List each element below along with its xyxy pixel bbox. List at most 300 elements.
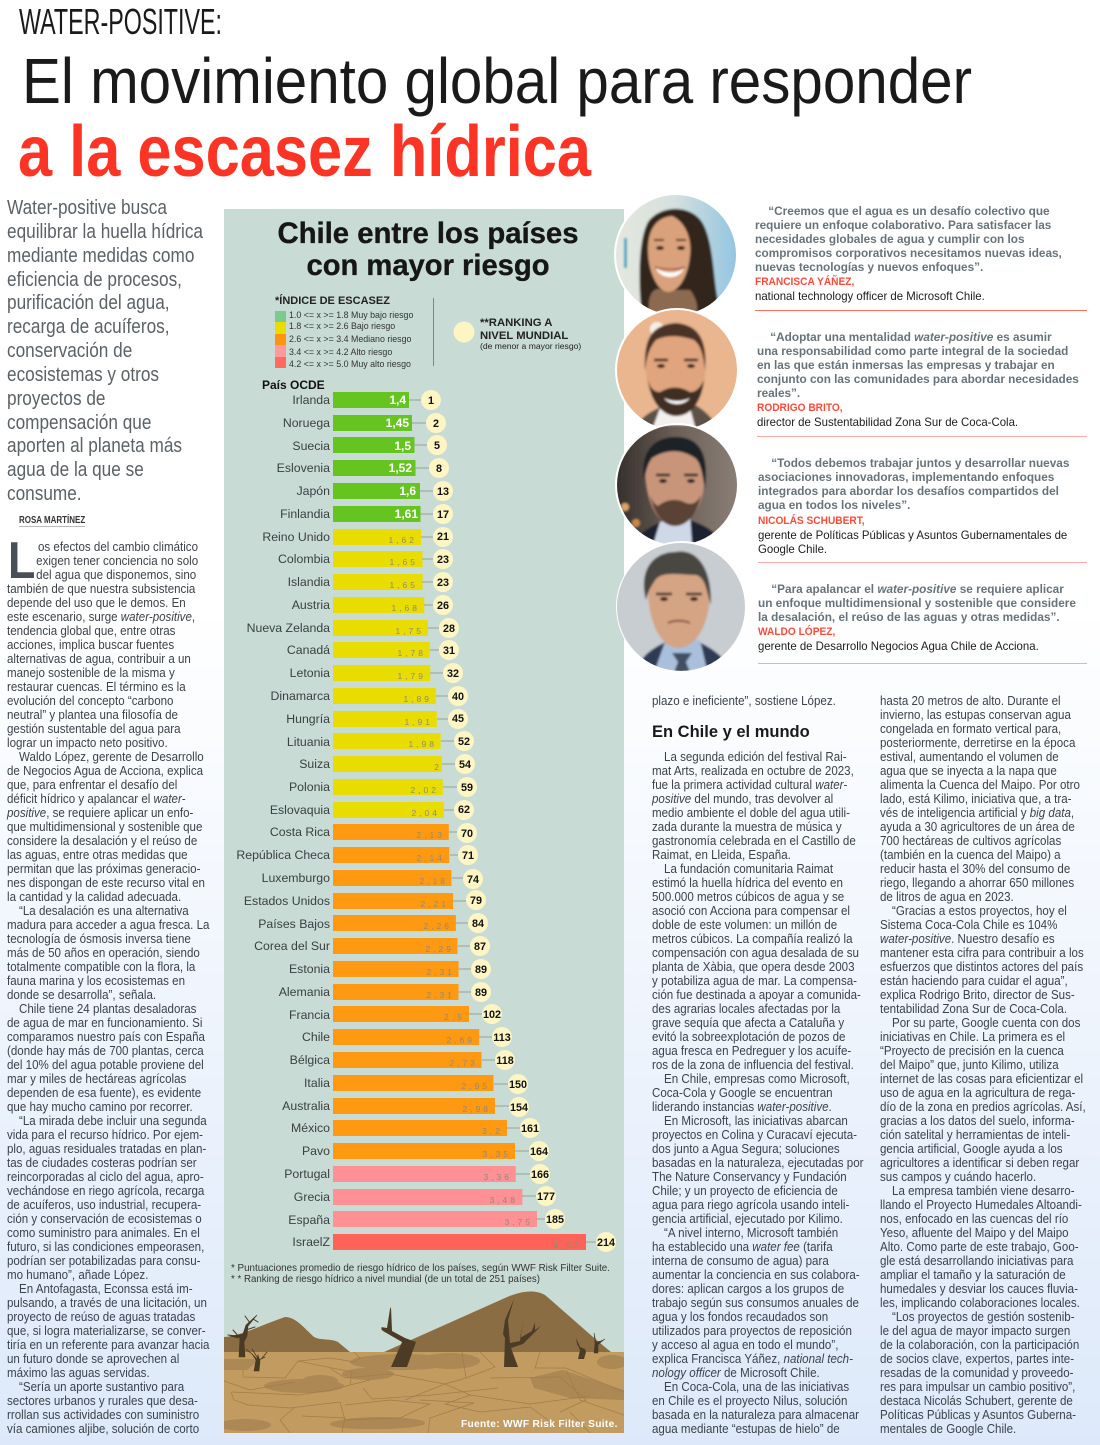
row: Eslovenia: Eslovenia <box>277 461 330 475</box>
row: Estados Unidos <box>244 890 486 910</box>
lead paragraph <box>7 197 203 505</box>
row: IsraelZ <box>292 1232 616 1252</box>
article column 2: evitó la sobreexplotación de pozos de <box>652 1030 845 1044</box>
mountains <box>224 1317 350 1352</box>
article column 2: proyectos en Colina y Curacaví ejecuta- <box>652 1128 857 1142</box>
article column 1: permitan que las próximas generacio- <box>7 862 200 876</box>
row: Islandia <box>288 572 453 592</box>
article column 2: dos junto a Agua Segura; soluciones <box>652 1142 840 1156</box>
row: Costa Rica: 2,13 <box>416 830 445 840</box>
legend: ranking: (de menor a mayor riesgo) <box>480 341 581 351</box>
lead paragraph: purificación del agua, <box>7 292 170 314</box>
row: Colombia: 23 <box>437 554 449 566</box>
quote: Nicolás Schubert: integrados para abordar los desafíos compartidos del <box>758 484 1059 498</box>
row: Grecia <box>294 1186 556 1206</box>
article column 3: humedales y desviar los cauces fluvia- <box>880 1282 1078 1296</box>
row: Australia: Australia <box>282 1099 330 1113</box>
row: Suiza: Suiza <box>299 757 330 771</box>
row: Canadá <box>287 640 459 660</box>
row: España <box>288 1209 565 1229</box>
article column 2: grave sequía que afecta a Cataluña y <box>652 1016 844 1030</box>
row: IsraelZ: 214 <box>597 1237 615 1249</box>
quote: Nicolás Schubert: agua en todos los niveles”. <box>758 498 910 512</box>
article column 1: sectores urbanos y rurales que desa- <box>7 1394 198 1408</box>
article column 2: ción fue destinada a apoyar a comunida- <box>652 988 861 1002</box>
row: Polonia: 2,02 <box>410 785 439 795</box>
article column 2: zada durante la muestra de música y <box>652 820 842 834</box>
row: Italia: 2,95 <box>461 1081 490 1091</box>
row: Pavo: 164 <box>530 1146 548 1158</box>
row: IsraelZ: IsraelZ <box>292 1235 330 1249</box>
article column 3: resadas de la comunidad y proveedo- <box>880 1366 1073 1380</box>
article column 2: asoció con Acciona para compensar el <box>652 904 850 918</box>
row: Estonia: 2,31 <box>426 967 455 977</box>
article column 3: Yeso, afluente del Maipo y del Maipo <box>880 1226 1069 1240</box>
article column 1: vía camiones aljibe, solución de corto <box>7 1422 199 1436</box>
row: Eslovenia: 1,52 <box>389 461 412 475</box>
tree: left small <box>246 1349 267 1371</box>
article column 2: La fundación comunitaria Raimat <box>664 862 833 876</box>
column heading: País OCDE <box>262 378 325 392</box>
quote: Rodrigo Brito: director de Sustentabilidad Zona Sur de Coca-Cola. <box>757 415 1018 429</box>
article column 3: esfuerzos que distintos actores del país <box>880 960 1083 974</box>
portrait: Nicolás Schubert <box>610 423 740 547</box>
row: México <box>291 1118 540 1138</box>
row: Islandia: 1,65 <box>389 580 418 590</box>
lead paragraph: recarga de acuíferos, <box>7 316 170 338</box>
footnotes: * Puntuaciones promedio de riesgo hídrico de los países, según WWF Risk Filter Suite. <box>231 1263 610 1274</box>
row: Francia: Francia <box>289 1008 330 1022</box>
row: Austria: 26 <box>437 600 449 612</box>
row: Austria: 1,68 <box>391 603 420 613</box>
quote: Rodrigo Brito: RODRIGO BRITO, <box>757 402 843 414</box>
article column 1: “La mirada debe incluir una segunda <box>19 1114 207 1128</box>
row: Dinamarca: 40 <box>452 691 464 703</box>
article column 1: acciones, implica buscar fuentes <box>7 638 174 652</box>
article column 1: positive, se requiere aplicar un enfo- <box>7 806 193 820</box>
article column 3 <box>880 694 1086 1436</box>
row: Austria <box>292 595 453 615</box>
chart heading: Chile entre los países <box>278 217 578 250</box>
row: México: 3,2 <box>482 1126 503 1136</box>
article column 1 <box>6 540 210 1436</box>
legend: scarcity index: 1.8 <= x >= 2.6 Bajo riesgo <box>289 321 395 331</box>
article column 1: evolución del concepto “carbono <box>7 694 173 708</box>
article column 3: lado, está Kilimo, iniciativa que, a tra- <box>880 792 1072 806</box>
byline: ROSA MARTÍNEZ <box>19 514 85 526</box>
row: España: España <box>288 1213 330 1227</box>
article column 1: un futuro donde se aprovechen al <box>7 1352 179 1366</box>
article column 1: plo, aguas residuales tratadas en plan- <box>7 1142 206 1156</box>
row: Alemania: 2,31 <box>426 990 455 1000</box>
panel: chart <box>224 209 624 1433</box>
row: Pavo <box>302 1141 549 1161</box>
quote: Rodrigo Brito: una responsabilidad como parte integral de la sociedad <box>757 344 1068 358</box>
row: Costa Rica: 70 <box>461 828 473 840</box>
quote: Francisca Yáñez: nuevas tecnologías y nuevos enfoques”. <box>755 260 983 274</box>
quote: Nicolás Schubert: NICOLÁS SCHUBERT, <box>758 515 865 527</box>
article column 2: basada en la naturaleza para almacenar <box>652 1408 859 1422</box>
panel background <box>224 209 624 1433</box>
quote: Francisca Yáñez <box>755 204 1062 303</box>
article column 2: des agrarias locales afectadas por la <box>652 1002 840 1016</box>
row: Polonia: 59 <box>461 782 473 794</box>
row: Pavo: 3,35 <box>482 1149 511 1159</box>
article column 1: nes dispongan de este recurso vital en <box>7 876 205 890</box>
row: Noruega: Noruega <box>283 416 330 430</box>
article column 2: positive del mundo, tras devolver al <box>652 792 833 806</box>
row: Colombia: 1,65 <box>389 557 418 567</box>
row: Nueva Zelanda: 1,75 <box>395 626 424 636</box>
legend: scarcity index: 3.4 <= x >= 4.2 Alto riesgo <box>289 347 392 357</box>
article column 3: ampliar el tamaño y la saturación de <box>880 1268 1066 1282</box>
article column 2: nology officer de Microsoft Chile. <box>652 1366 820 1380</box>
row: Bélgica <box>290 1050 515 1070</box>
lead paragraph: equilibrar la huella hídrica <box>7 221 203 243</box>
article column 1: reincorporadas al ciclo del agua, apro- <box>7 1170 204 1184</box>
quote: Nicolás Schubert <box>758 456 1069 556</box>
article column 2: ha establecido una water fee (tarifa <box>652 1240 833 1254</box>
article column 3: iniciativas en Chile. La primera es el <box>880 1030 1065 1044</box>
article column 3: Políticas Públicas y Asuntos Guberna- <box>880 1408 1076 1422</box>
row: Irlanda: Irlanda <box>292 393 330 407</box>
article column 2: trabajo según sus consumos anuales de <box>652 1296 859 1310</box>
quote: Francisca Yáñez: necesidades globales de agua y cumplir con los <box>755 232 1025 246</box>
portrait: Francisca Yáñez <box>614 195 736 312</box>
article column 1: podrían ser potabilizadas para consu- <box>7 1254 200 1268</box>
article column 3: de socios clave, expertos, partes inte- <box>880 1352 1074 1366</box>
article column 3: ayuda a 30 agricultores de un área de <box>880 820 1075 834</box>
row: Lituania: 52 <box>458 736 470 748</box>
article column 3: mentales de Google Chile. <box>880 1422 1016 1436</box>
row: Francia: 2,5 <box>444 1012 465 1022</box>
article column 1: dependen de esa fuente), es evidente <box>7 1086 201 1100</box>
row: Irlanda: 1 <box>428 395 434 407</box>
portrait: Rodrigo Brito <box>615 308 737 426</box>
tree: left large <box>228 1315 258 1357</box>
row: Finlandia: Finlandia <box>280 507 330 521</box>
row: Reino Unido: Reino Unido <box>262 530 330 544</box>
legend: scarcity index: 1.0 <= x >= 1.8 Muy bajo riesgo <box>289 310 413 320</box>
article column 1: totalmente compatible con la flora, la <box>7 960 195 974</box>
article column 2: En Chile, empresas como Microsoft, <box>664 1072 850 1086</box>
footnotes: * * Ranking de riesgo hídrico a nivel mundial (de un total de 251 países) <box>231 1274 540 1285</box>
row: Noruega: 1,45 <box>386 416 409 430</box>
row: Nueva Zelanda: Nueva Zelanda <box>247 621 330 635</box>
row: España: 3,75 <box>504 1217 533 1227</box>
article column 1: que, si logra materializarse, se conver- <box>7 1324 206 1338</box>
row: Bélgica: Bélgica <box>290 1053 330 1067</box>
article column 2: en Chile es el proyecto Nilus, solución <box>652 1394 847 1408</box>
article column 1: también de que nuestra subsistencia <box>7 582 195 596</box>
article column 1: rrollan sus actividades con suministro <box>7 1408 199 1422</box>
article column 1: máximo las aguas servidas. <box>7 1366 150 1380</box>
row: Chile: 2,69 <box>446 1035 475 1045</box>
article column 2: compensación con agua desalada de su <box>652 946 859 960</box>
row: México: 161 <box>521 1123 539 1135</box>
article column 3: de la colaboración, con la participación <box>880 1338 1079 1352</box>
source credit: Fuente: WWF Risk Filter Suite. <box>461 1419 618 1430</box>
row: Islandia: 23 <box>437 577 449 589</box>
row: Estados Unidos: 79 <box>470 895 482 907</box>
row: Australia: 154 <box>510 1102 528 1114</box>
quote: Rodrigo Brito: “Adoptar una mentalidad water-positive es asumir <box>770 330 1052 344</box>
article column 2: interna de consumo de agua) para <box>652 1254 829 1268</box>
row: Reino Unido <box>262 527 453 547</box>
ground <box>224 1352 624 1433</box>
article column 1: tendencia global que, entre otras <box>7 624 175 638</box>
article column 3: les, implicando colaboraciones locales. <box>880 1296 1080 1310</box>
quote: Francisca Yáñez: compromisos corporativos necesitamos nuevas ideas, <box>755 246 1062 260</box>
bar chart <box>236 390 616 1252</box>
legend: scarcity index: *ÍNDICE DE ESCASEZ <box>275 294 390 307</box>
row: Hungría: Hungría <box>286 712 330 726</box>
article column 1: tecnología de ósmosis inversa tiene <box>7 932 191 946</box>
row: Hungría: 1,91 <box>404 717 433 727</box>
row: Portugal: 3,36 <box>483 1172 512 1182</box>
row: Suiza: 2 <box>434 762 442 772</box>
row: Italia <box>304 1074 528 1094</box>
row: Corea del Sur: Corea del Sur <box>254 939 330 953</box>
article column 1: como suministro para animales. En el <box>7 1226 200 1240</box>
article column 3: le del agua de mayor impacto surgen <box>880 1324 1070 1338</box>
row: Alemania: Alemania <box>279 985 330 999</box>
article column 2: planta de Xàbia, que opera desde 2003 <box>652 960 855 974</box>
drop cap: L <box>8 532 35 590</box>
row: Hungría <box>286 709 468 729</box>
article column 2: gastronomía celebrada en el Castillo de <box>652 834 856 848</box>
article column 3: alimenta la Cuenca del Maipo. Por otro <box>880 778 1080 792</box>
row: Finlandia: 17 <box>437 509 449 521</box>
article column 2: 500.000 metros cúbicos de agua y se <box>652 890 844 904</box>
row: Reino Unido: 21 <box>437 531 449 543</box>
row: Eslovaquia: Eslovaquia <box>270 803 330 817</box>
article column 1: vida para el recurso hídrico. Por ejem- <box>7 1128 203 1142</box>
article column 1: tas de ciudades costeras podrían ser <box>7 1156 197 1170</box>
article column 1: considere la desalación y el reúso de <box>7 834 197 848</box>
ground cracks <box>224 1352 624 1433</box>
article column 3: Por su parte, Google cuenta con dos <box>892 1016 1080 1030</box>
row: Bélgica: 118 <box>496 1055 514 1067</box>
title: WATER-POSITIVE: <box>19 1 222 42</box>
legend: scarcity index <box>275 294 413 369</box>
row: Italia: 150 <box>509 1079 527 1091</box>
row: Noruega: 2 <box>433 418 439 430</box>
row: Austria: Austria <box>292 598 330 612</box>
row: Grecia: Grecia <box>294 1190 330 1204</box>
article column 3: del Maipo” que, junto Kilimo, utiliza <box>880 1058 1059 1072</box>
article column 1: déficit hídrico y apalancar el water- <box>7 792 185 806</box>
row: Eslovaquia: 62 <box>458 804 470 816</box>
quote: Francisca Yáñez: FRANCISCA YÁÑEZ, <box>755 276 854 288</box>
article column 1: del 10% del agua potable proviene del <box>7 1058 204 1072</box>
footnotes <box>231 1263 610 1285</box>
row: Japón: 13 <box>437 486 449 498</box>
quote: Waldo López: gerente de Desarrollo Negocios Agua Chile de Acciona. <box>758 639 1039 653</box>
article column 3: water-positive. Nuestro desafío es <box>880 932 1055 946</box>
row: Eslovaquia: 2,04 <box>411 808 440 818</box>
row: España: 185 <box>546 1214 564 1226</box>
row: Japón: 1,6 <box>399 484 416 498</box>
quote: Nicolás Schubert: Google Chile. <box>758 542 827 556</box>
row: Costa Rica <box>270 823 477 843</box>
row: Islandia: Islandia <box>288 575 330 589</box>
article column 1: (donde hay más de 700 plantas, cerca <box>7 1044 204 1058</box>
quote: Waldo López <box>758 582 1076 653</box>
row: Alemania: 89 <box>475 987 487 999</box>
row: República Checa: 71 <box>462 850 474 862</box>
article column 3: “Los proyectos de gestión sostenib- <box>892 1310 1075 1324</box>
lead paragraph: conservación de <box>7 340 132 362</box>
article column 1: depende del uso que le demos. En <box>7 596 186 610</box>
row: Corea del Sur: 2,29 <box>425 944 454 954</box>
row: República Checa <box>236 845 478 865</box>
row: Colombia <box>278 549 453 569</box>
article column 1: mo humano”, añade López. <box>7 1268 148 1282</box>
quote: Waldo López: “Para apalancar el water-positive se requiere aplicar <box>771 582 1064 596</box>
row: Suecia <box>292 435 447 455</box>
article column 1: “Sería un aporte sustantivo para <box>19 1380 184 1394</box>
row: Hungría: 45 <box>452 713 464 725</box>
lead paragraph: ecosistemas y otros <box>7 364 159 386</box>
article column 1: que multidimensional y sostenible que <box>7 820 202 834</box>
article column 1: alternativas de agua, contribuir a un <box>7 652 191 666</box>
article column 3: llando el Proyecto Humedales Altoandi- <box>880 1198 1082 1212</box>
row: Alemania <box>279 982 491 1002</box>
quote: Rodrigo Brito: en las que están inmersas las empresas y trabajar en <box>757 358 1055 372</box>
article column 3: (también en la cuenca del Maipo) a <box>880 848 1061 862</box>
article column 3: uso de agua en la agricultura de rega- <box>880 1086 1075 1100</box>
article column 3: res para impulsar un cambio positivo”, <box>880 1380 1075 1394</box>
row: República Checa: República Checa <box>236 848 330 862</box>
article column 2: En Microsoft, las iniciativas abarcan <box>664 1114 848 1128</box>
row: Irlanda: 1,4 <box>389 393 406 407</box>
article column 1: la cantidad y la calidad adecuada. <box>7 890 181 904</box>
article column 3: Alto. Como parte de este trabajo, Goo- <box>880 1240 1079 1254</box>
subheading: En Chile y el mundo <box>652 723 810 741</box>
legend: ranking: NIVEL MUNDIAL <box>480 330 568 342</box>
row: Letonia: 32 <box>447 668 459 680</box>
article column 1: os efectos del cambio climático <box>38 540 198 554</box>
row: Canadá: 1,78 <box>397 648 426 658</box>
row: Japón <box>296 481 453 501</box>
article column 2: agua para riego agrícola usando inteli- <box>652 1198 849 1212</box>
article column 2: medio ambiente el doble del agua utili- <box>652 806 850 820</box>
article column 1: restaurar cuencas. El término es la <box>7 680 186 694</box>
row: Estonia <box>289 959 491 979</box>
article column 2: En Coca-Cola, una de las iniciativas <box>664 1380 849 1394</box>
row: Finlandia <box>280 504 453 524</box>
article column 1: proyecto de reúso de aguas tratadas <box>7 1310 195 1324</box>
article column 1: En Antofagasta, Econssa está im- <box>19 1282 193 1296</box>
row: Lituania <box>287 731 474 751</box>
article column 2: gencia artificial, ejecutado por Kilimo. <box>652 1212 843 1226</box>
article column 1: que, para enfrentar el desafío del <box>7 778 177 792</box>
article column 1: más de 50 años en operación, siendo <box>7 946 200 960</box>
row: Canadá: Canadá <box>287 643 330 657</box>
article column 2: The Nature Conservancy y Fundación <box>652 1170 847 1184</box>
row: Bélgica: 2,73 <box>449 1058 478 1068</box>
quote: Waldo López: un enfoque multidimensional y sostenible que considere <box>758 596 1076 610</box>
chart heading <box>278 217 578 282</box>
row: Polonia: Polonia <box>289 780 330 794</box>
article column 1: del agua que disponemos, sino <box>36 568 196 582</box>
row: Chile: 113 <box>493 1032 511 1044</box>
row: Francia <box>289 1004 502 1024</box>
article column 3: ción satelital y herramientas de inteli- <box>880 1128 1070 1142</box>
quote: Waldo López: la desalación, el reúso de las aguas y otras medidas”. <box>758 610 1060 624</box>
row: Portugal: Portugal <box>284 1167 330 1181</box>
row: México: México <box>291 1121 330 1135</box>
title: a la escasez hídrica <box>18 112 592 190</box>
row: Pavo: Pavo <box>302 1144 330 1158</box>
row: Japón: Japón <box>296 484 330 498</box>
quote: Waldo López: WALDO LÓPEZ, <box>758 626 835 638</box>
row: Suiza: 54 <box>459 759 471 771</box>
article column 2: doble de este volumen: un millón de <box>652 918 837 932</box>
article column 1: madura para acceder a agua fresca. La <box>7 918 209 932</box>
article column 3: invierno, las estupas conservan agua <box>880 708 1071 722</box>
article column 2: fue la primera actividad cultural water- <box>652 778 847 792</box>
article column 1: gestión sustentable del agua para <box>7 722 181 736</box>
portraits <box>614 195 745 671</box>
row: Suecia: 1,5 <box>394 439 411 453</box>
row: Países Bajos: Países Bajos <box>258 917 330 931</box>
row: Luxemburgo: 2,18 <box>419 876 448 886</box>
lead paragraph: proyectos de <box>7 388 105 410</box>
row: Lituania: Lituania <box>287 735 330 749</box>
quote: Francisca Yáñez: national technology officer de Microsoft Chile. <box>755 289 985 303</box>
illustration: dry landscape <box>219 1291 627 1433</box>
article column 1: Chile tiene 24 plantas desaladoras <box>19 1002 196 1016</box>
article column 3: tentabilidad Zona Sur de Coca-Cola. <box>880 1002 1067 1016</box>
legend: scarcity index: 4.2 <= x >= 5.0 Muy alto riesgo <box>289 359 411 369</box>
row: Nueva Zelanda <box>247 618 459 638</box>
article column 3: La empresa también viene desarro- <box>892 1184 1075 1198</box>
legend: scarcity index: 2.6 <= x >= 3.4 Mediano riesgo <box>289 334 412 344</box>
tree: right small <box>576 1338 586 1359</box>
article column 1: mar y miles de hectáreas agrícolas <box>7 1072 186 1086</box>
article column 2: estimó la huella hídrica del evento en <box>652 876 843 890</box>
quote: Nicolás Schubert: gerente de Políticas Públicas y Asuntos Gubernamentales de <box>758 528 1067 542</box>
article column 1: donde se desarrolla”, señala. <box>7 988 156 1002</box>
lead paragraph: eficiencia de procesos, <box>7 269 182 291</box>
article column 2: aumentar la conciencia en sus colabora- <box>652 1268 860 1282</box>
row: Nueva Zelanda: 28 <box>443 623 455 635</box>
article column 3: gracias a los datos del suelo, informa- <box>880 1114 1075 1128</box>
row: Estados Unidos: 2,21 <box>420 899 449 909</box>
legend: ranking: **RANKING A <box>480 317 552 329</box>
quote: Francisca Yáñez: requiere un enfoque colaborativo. Para satisfacer las <box>755 218 1051 232</box>
article column 1: ción y conservación de ecosistemas o <box>7 1212 202 1226</box>
lead paragraph: aporten al planeta más <box>7 435 182 457</box>
row: Suiza <box>299 754 475 774</box>
row: Reino Unido: 1,62 <box>388 535 417 545</box>
article column 1: de agua de mar en funcionamiento. Si <box>7 1016 202 1030</box>
row: Eslovaquia <box>270 800 474 820</box>
article column 3: estival, aumentando el volumen de <box>880 750 1059 764</box>
article column 1: las aguas, entre otras medidas que <box>7 848 188 862</box>
article column 1: Waldo López, gerente de Desarrollo <box>19 750 204 764</box>
article column 2: explica Francisca Yáñez, national tech- <box>652 1352 853 1366</box>
row: Letonia <box>290 663 463 683</box>
article column 1: tiría en un referente para avanzar hacia <box>7 1338 209 1352</box>
row: Grecia: 177 <box>537 1191 555 1203</box>
legend: ranking <box>454 317 581 351</box>
row: Irlanda <box>292 390 441 410</box>
article column 2: liderando instancias water-positive. <box>652 1100 832 1114</box>
title <box>18 1 972 190</box>
